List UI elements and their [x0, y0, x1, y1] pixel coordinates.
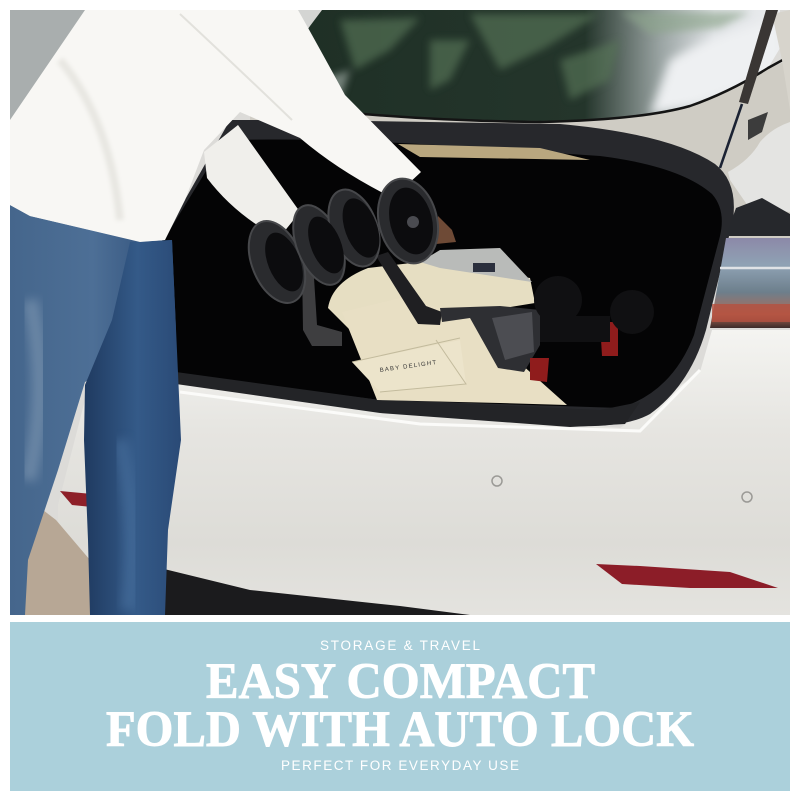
trunk lower sill [176, 372, 640, 427]
heading: FOLD WITH AUTO LOCK [106, 702, 694, 758]
background wall [10, 10, 85, 120]
person: white shirt [10, 10, 421, 242]
parking sensors [492, 476, 752, 502]
heading: EASY COMPACT [206, 654, 595, 710]
trunk opening [160, 120, 734, 426]
folded stroller [238, 172, 654, 405]
person: jeans [10, 205, 181, 615]
panel: photograph of stroller being folded into a car trunk [10, 10, 790, 615]
taillight [710, 238, 790, 328]
panel: caption banner [10, 622, 790, 791]
white fabric strap at right of trunk [728, 10, 790, 212]
rear wheels in shadow [534, 276, 654, 342]
dark trim above taillight [726, 198, 790, 236]
stroller tag [473, 263, 495, 272]
eyebrow text: STORAGE & TRAVEL [320, 638, 480, 653]
pavement [25, 511, 90, 615]
wheels [248, 178, 439, 304]
stroller canopy fabric [328, 262, 535, 330]
rear window with tree reflection [308, 10, 780, 121]
car body highlight line [180, 370, 700, 431]
stroller frame [302, 262, 342, 346]
car upper body above trunk [250, 60, 790, 240]
stroller brand label: BABY DELIGHT [379, 360, 438, 374]
white car body below trunk [72, 330, 790, 454]
left reflector [60, 491, 87, 506]
lower bumper dark trim [160, 568, 470, 615]
rear reflector [596, 564, 778, 588]
trunk interior [160, 140, 722, 408]
subtext: PERFECT FOR EVERYDAY USE [281, 758, 519, 773]
gas strut [720, 10, 778, 168]
red folded parts [530, 322, 618, 382]
wheel hubs [265, 188, 433, 292]
trunk lid tan strip [398, 144, 590, 160]
window seal line [362, 59, 782, 124]
hand [436, 216, 456, 244]
heading [106, 654, 694, 758]
